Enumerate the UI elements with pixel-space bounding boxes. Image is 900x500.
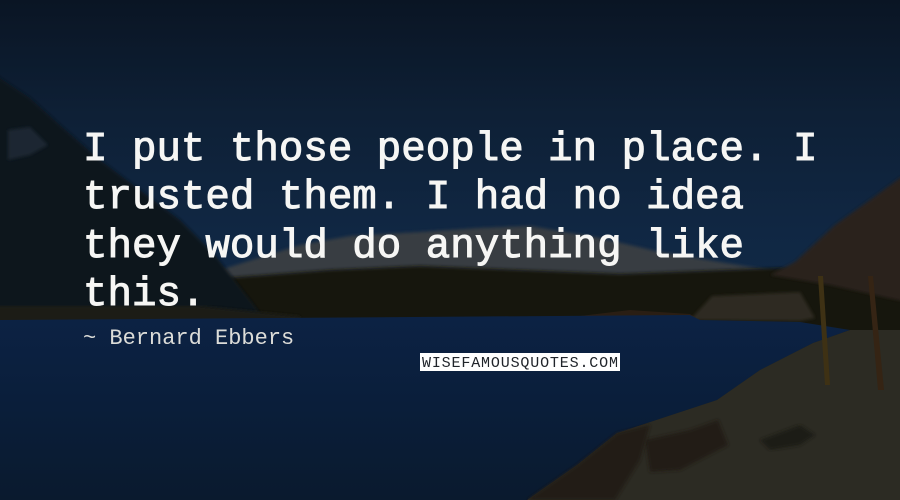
- quote text: I put those people in place. I: [83, 127, 817, 173]
- sky: [0, 0, 900, 330]
- near shore strip left: [0, 306, 300, 324]
- left mountain snow patch: [8, 127, 48, 160]
- quote text: they would do anything like: [83, 224, 744, 270]
- quote text: trusted them. I had no idea: [83, 175, 744, 221]
- tree line: [200, 266, 900, 335]
- rock shore edge: [527, 425, 650, 500]
- quote text: [83, 127, 817, 318]
- foreground rocks: [645, 420, 728, 472]
- post right: [868, 276, 884, 390]
- watermark badge: WISEFAMOUSQUOTES.COM: [422, 355, 618, 372]
- post left: [818, 276, 830, 385]
- attribution: ~ Bernard Ebbers: [83, 326, 294, 351]
- lake: [0, 315, 850, 500]
- rock: [760, 425, 815, 450]
- shore: [527, 330, 900, 500]
- quote text: this.: [83, 272, 205, 318]
- right mountain: [770, 165, 900, 305]
- distant snowy hills: [220, 226, 780, 300]
- left mountain: [0, 64, 262, 324]
- rock bluff: [690, 292, 815, 321]
- far bank: [440, 310, 700, 320]
